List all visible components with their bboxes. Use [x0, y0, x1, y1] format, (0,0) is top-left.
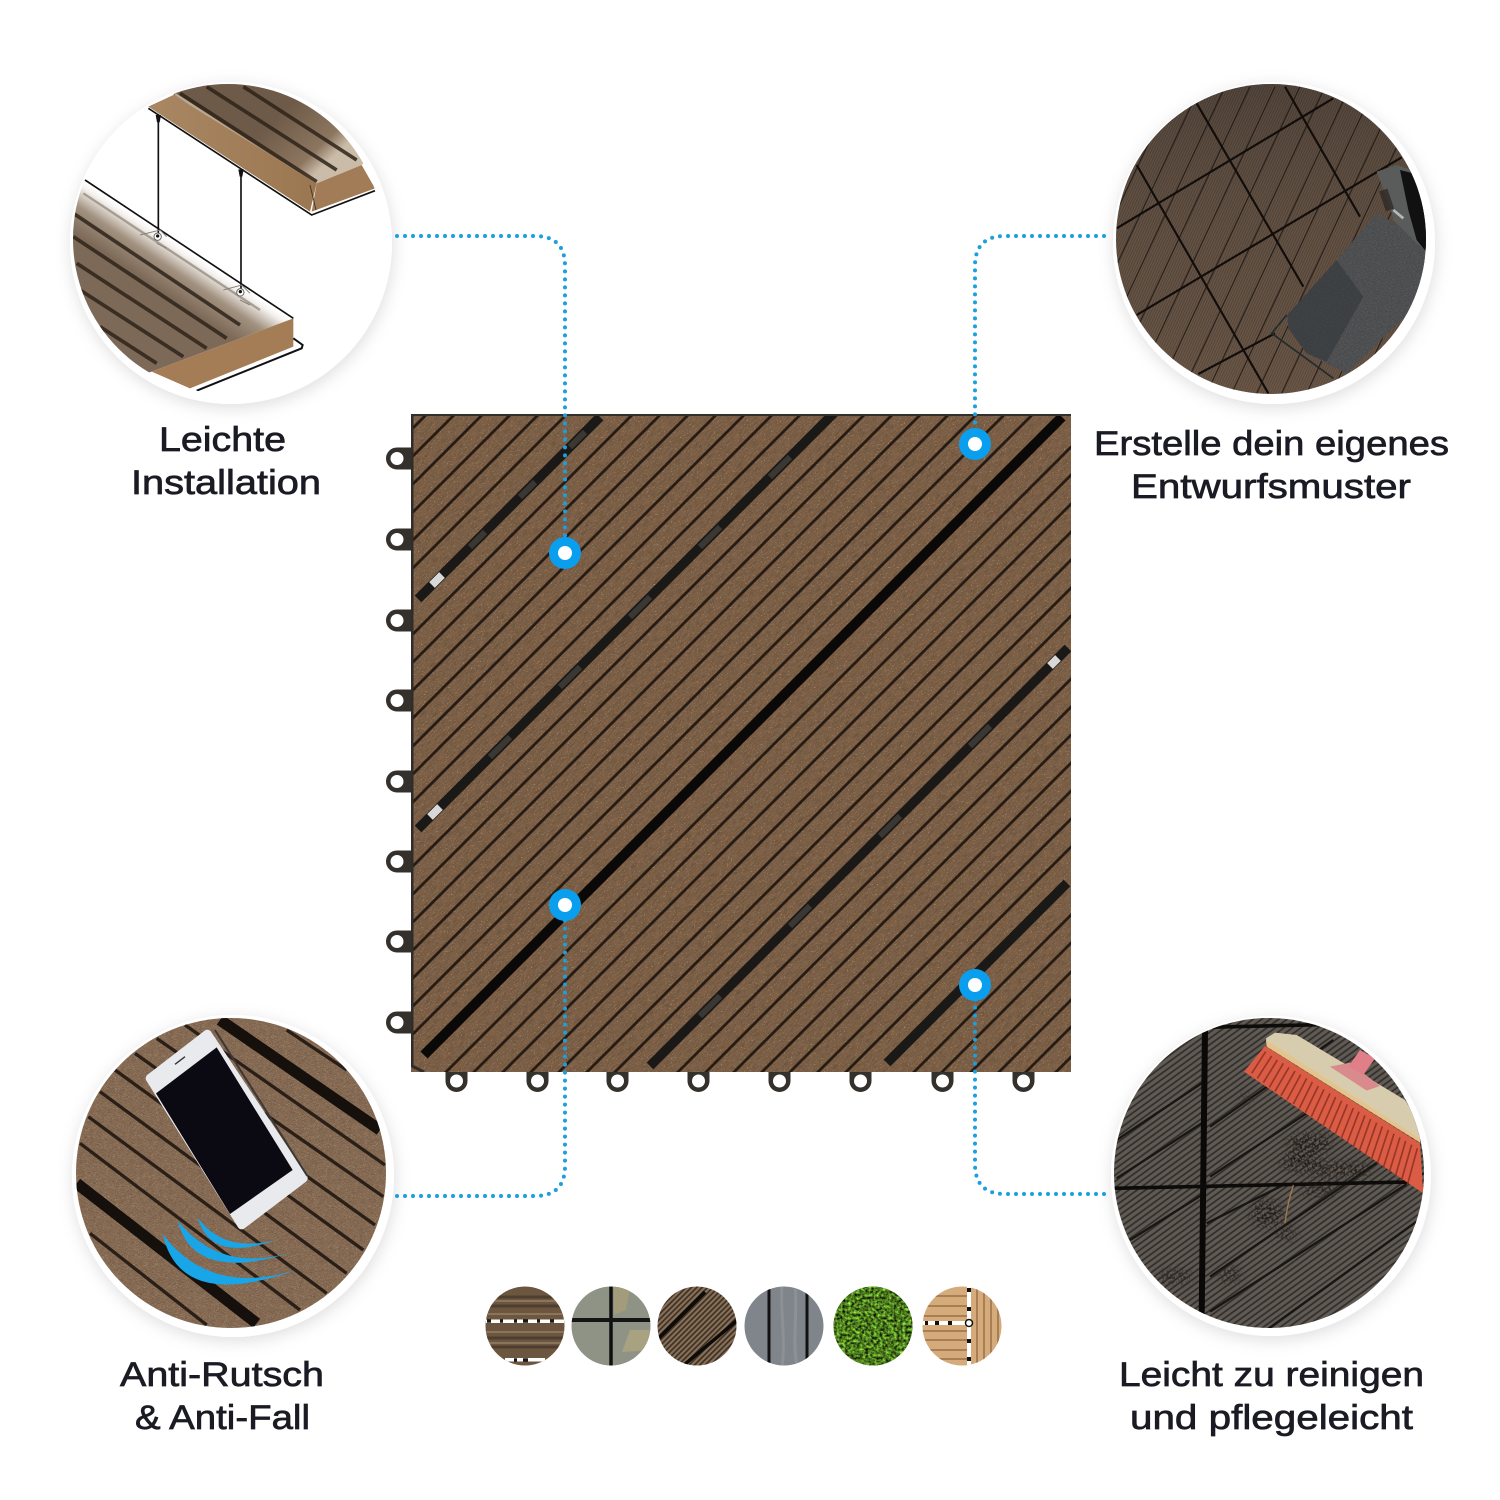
marker: lower right	[959, 969, 991, 1001]
callout circle: Entwurfsmuster	[1109, 81, 1441, 413]
swatch: slate stone	[571, 1286, 651, 1366]
colour swatches	[485, 1286, 1002, 1370]
swatch: artificial grass	[833, 1286, 913, 1366]
broom	[1244, 1033, 1423, 1193]
marker: lower left	[549, 889, 581, 921]
label: Anti-Rutsch & Anti-Fall: & Anti-Fall	[135, 1399, 310, 1437]
callout circle: Leichte Installation	[60, 70, 400, 410]
dotted connector: Entwurfsmuster	[975, 236, 1104, 444]
dotted connector: Leichte Installation	[397, 236, 565, 553]
callout circle: Anti-Rutsch	[60, 1010, 400, 1350]
phone	[150, 1030, 307, 1225]
chair	[1377, 165, 1425, 250]
label: Leichte Installation	[131, 421, 321, 502]
dotted connector: reinigen	[975, 985, 1104, 1194]
photo: broom sweeping dirt from dark deck	[1114, 1018, 1424, 1328]
swatch: wood grain	[485, 1286, 565, 1366]
label: Anti-Rutsch & Anti-Fall	[120, 1356, 324, 1437]
marker: upper right	[959, 428, 991, 460]
label: Erstelle dein eigenes Entwurfsmuster: Entwurfsmuster	[1131, 468, 1411, 506]
label: Anti-Rutsch & Anti-Fall: Anti-Rutsch	[120, 1356, 324, 1394]
swatch: diagonal wood	[658, 1286, 736, 1366]
photo: phone on deck with blue slip-free arcs	[76, 1018, 386, 1328]
label: Erstelle dein eigenes Entwurfsmuster: Erstelle dein eigenes	[1094, 425, 1449, 463]
board gaps	[418, 412, 1068, 1066]
tile surface with grooves	[411, 414, 1071, 1072]
marker: upper left	[549, 537, 581, 569]
rug	[1287, 213, 1425, 373]
debris	[1157, 1092, 1373, 1283]
slip arcs	[163, 1217, 296, 1285]
label: Leichte Installation: Leichte	[159, 421, 286, 459]
label: Leicht zu reinigen und pflegeleicht: Leicht zu reinigen	[1119, 1356, 1424, 1394]
label: Leicht zu reinigen und pflegeleicht: und pflegeleicht	[1130, 1399, 1414, 1437]
illustration: plank exploded installation view	[73, 84, 376, 392]
swatch: tan wood tiles	[922, 1286, 1002, 1366]
label: Leichte Installation: Installation	[131, 464, 321, 502]
tile connector clips	[388, 449, 1033, 1090]
label: Erstelle dein eigenes Entwurfsmuster	[1094, 425, 1449, 506]
photo: tiled deck with chair and rug	[1116, 84, 1426, 394]
callout circle: reinigen	[1100, 1010, 1440, 1350]
swatch: grey wood	[744, 1286, 824, 1366]
dotted connector: Anti-Rutsch	[397, 905, 565, 1196]
main product: diagonal deck tile	[386, 414, 1071, 1092]
label: Leicht zu reinigen und pflegeleicht	[1119, 1356, 1424, 1437]
